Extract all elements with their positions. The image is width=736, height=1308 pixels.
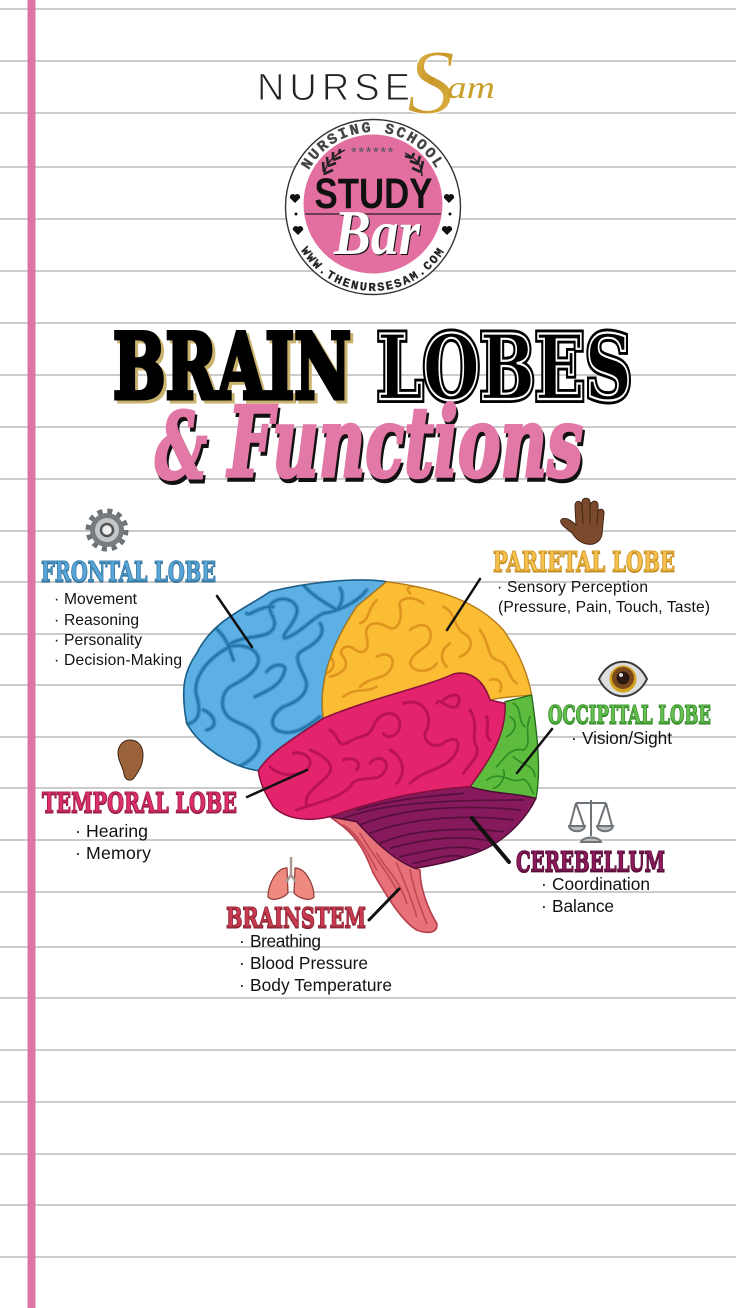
logo: Nurse Sam: am — [447, 69, 495, 105]
icon: scales — [569, 800, 613, 842]
cerebellum — [330, 787, 536, 868]
icon: lungs — [268, 857, 314, 899]
list: frontal functions: · — [54, 632, 59, 649]
title word: LOBES: LOBES — [377, 315, 632, 421]
title word: BRAIN: BRAIN — [113, 314, 351, 420]
leader line: brainstem — [369, 889, 399, 920]
logo: Nurse Sam: S — [407, 31, 455, 133]
heading: temporal lobe: TEMPORAL LOBE — [42, 788, 237, 819]
list: parietal functions: (Pressure, Pain, Touch, Taste) — [498, 599, 710, 616]
occipital lobe — [470, 695, 539, 798]
brain diagram — [184, 580, 539, 932]
list: temporal functions: Memory — [86, 843, 151, 863]
badge: Nursing School Study Bar: NURSING SCHOOL — [300, 122, 442, 170]
list: temporal functions — [75, 821, 151, 863]
list: parietal functions — [497, 579, 710, 616]
heading: parietal lobe: PARIETAL LOBE — [493, 547, 675, 578]
list: brainstem functions: · — [239, 931, 245, 951]
list: brainstem functions — [239, 931, 392, 995]
pink margin line — [28, 0, 36, 1308]
logo: Nurse Sam — [257, 31, 495, 133]
frontal lobe — [184, 580, 387, 771]
parietal lobe — [322, 582, 532, 718]
list: frontal functions: Movement — [64, 591, 138, 608]
list: brainstem functions: · — [239, 975, 245, 995]
list: brainstem functions: Breathing — [250, 931, 321, 951]
leader line: frontal — [217, 596, 252, 647]
list: cerebellum functions — [541, 874, 650, 916]
list: cerebellum functions: Balance — [552, 896, 614, 916]
list: frontal functions — [54, 591, 182, 669]
badge: Nursing School Study Bar: WWW.THENURSESAM.COM — [301, 246, 444, 292]
panel: parietal lobe — [493, 498, 710, 616]
heading: frontal lobe: FRONTAL LOBE — [41, 557, 216, 588]
panel: brainstem label — [226, 857, 392, 995]
badge: Nursing School Study Bar — [284, 118, 462, 296]
list: brainstem functions: Body Temperature — [250, 975, 392, 995]
list: frontal functions: Personality — [64, 632, 142, 649]
list: parietal functions: · — [497, 579, 502, 596]
title words: & Functions — [155, 386, 583, 500]
heading: cerebellum: CEREBELLUM — [516, 847, 665, 878]
list: frontal functions: Decision-Making — [64, 652, 182, 669]
list: parietal functions: Sensory Perception — [507, 579, 648, 596]
badge: Nursing School Study Bar: Bar — [333, 197, 421, 268]
list: brainstem functions: Blood Pressure — [250, 953, 368, 973]
icon: gear — [88, 512, 126, 548]
badge: Nursing School Study Bar: ****** — [351, 144, 395, 161]
list: temporal functions: Hearing — [86, 821, 148, 841]
list: cerebellum functions: Coordination — [552, 874, 650, 894]
brainstem — [330, 817, 437, 932]
list: occipital functions: · — [571, 728, 577, 748]
list: temporal functions: · — [75, 821, 81, 841]
title word: LOBES: LOBES — [377, 315, 632, 421]
panel: cerebellum — [516, 800, 665, 916]
list: cerebellum functions: · — [541, 874, 547, 894]
title words: & Functions: & — [155, 392, 207, 500]
leader line: cerebellum — [472, 818, 509, 862]
list: frontal functions: · — [54, 591, 59, 608]
panel: frontal lobe — [41, 512, 216, 669]
heading: brainstem: BRAINSTEM — [226, 903, 366, 934]
icon: hand — [561, 498, 604, 544]
leader line: parietal — [447, 579, 480, 630]
logo: Nurse Sam: NURSE — [257, 67, 410, 109]
panel: occipital lobe — [548, 662, 711, 748]
leader line: occipital — [517, 729, 552, 773]
list: occipital functions: Vision/Sight — [582, 728, 672, 748]
list: temporal functions: · — [75, 843, 81, 863]
list: frontal functions: Reasoning — [64, 612, 139, 629]
list: frontal functions: · — [54, 652, 59, 669]
badge: Nursing School Study Bar: STUDY — [314, 170, 432, 218]
leader line: temporal — [247, 770, 307, 797]
list: frontal functions: · — [54, 612, 59, 629]
list: brainstem functions: · — [239, 953, 245, 973]
panel: temporal lobe — [42, 740, 237, 863]
icon: eye — [599, 662, 647, 696]
title — [113, 314, 632, 500]
temporal lobe — [258, 673, 505, 819]
icon: ear — [118, 740, 143, 780]
list: cerebellum functions: · — [541, 896, 547, 916]
